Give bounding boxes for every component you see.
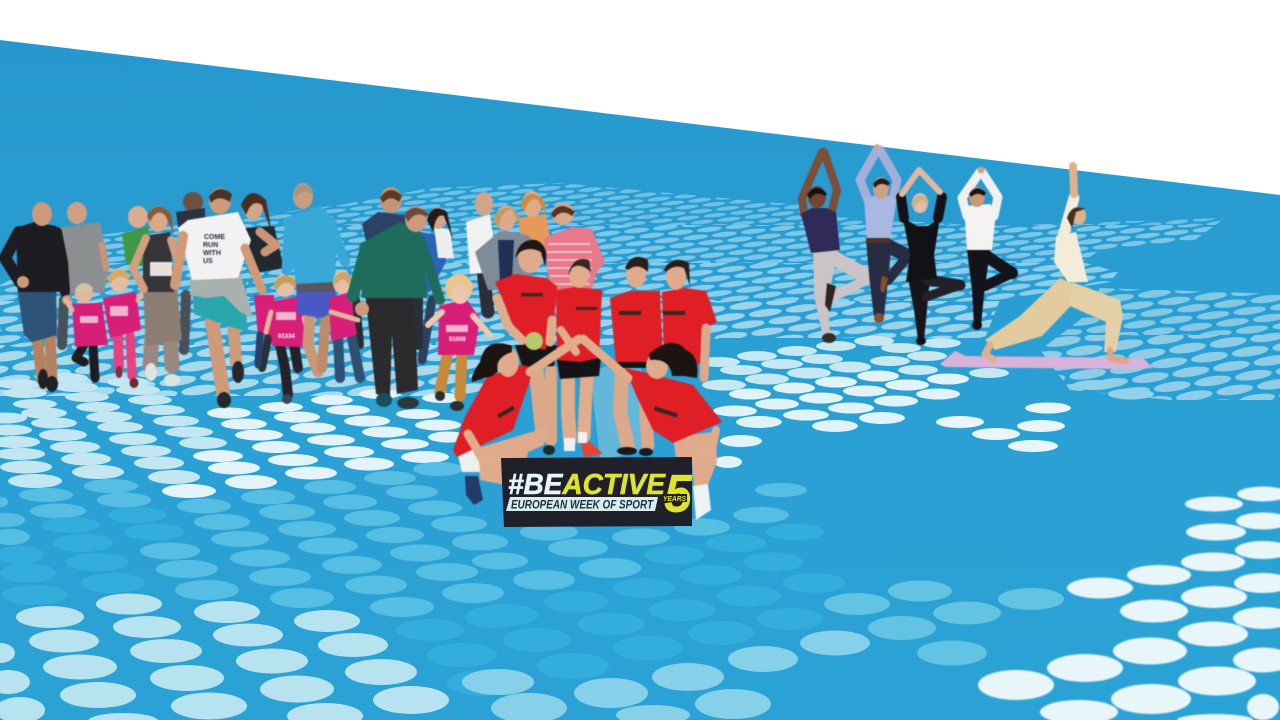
person: dark-haired woman behind	[241, 193, 284, 274]
floor patch under team	[590, 360, 650, 460]
shirt text: COME	[204, 234, 225, 241]
legs of runners in the background	[62, 295, 432, 368]
person: heads at the back	[176, 192, 205, 240]
person: yoga man in white shirt	[962, 166, 1012, 330]
person: crouching girl left	[453, 339, 579, 505]
person: yoga woman in navy top	[801, 152, 870, 343]
person: man in green sweatshirt	[353, 206, 449, 409]
dot field: deep blue faint dots	[0, 507, 845, 696]
person: navy jacket man behind	[362, 187, 416, 250]
person: woman in denim jacket	[475, 205, 540, 290]
banner numeral 5 years: 5	[664, 464, 693, 524]
person: man in bright blue top	[286, 183, 345, 372]
banner: #BEACTIVE European Week of Sport	[501, 457, 693, 527]
person: crouching girl right	[583, 339, 722, 520]
shirt text	[203, 234, 225, 265]
person: girl with dark leggings: 91334	[278, 334, 295, 340]
banner: #BEACTIVE European Week of Sport: EUROPEAN WEEK OF SPORT	[511, 500, 654, 512]
person: man in black long sleeve	[5, 202, 72, 392]
banner: #BEACTIVE European Week of Sport: YEARS	[663, 494, 686, 503]
person: girl with dark leggings	[266, 273, 312, 404]
team: red shirts group	[453, 240, 722, 520]
dot field: lighter cyan dots on the right edge of the centre mass	[824, 580, 1064, 666]
person: small child behind	[254, 295, 275, 365]
person: blonde woman in orange	[518, 191, 552, 250]
person: small boy in pink	[66, 283, 108, 378]
people: yoga group on the right	[801, 144, 1153, 369]
person: yoga man in lavender shirt	[860, 144, 908, 323]
person: grey shirt man behind	[56, 202, 109, 294]
shirt text: RUN	[203, 242, 218, 249]
person: man in white Come Run With Us tee	[175, 188, 262, 408]
person: tall girl holding ball	[495, 240, 557, 455]
person: woman in blue jacket and white top	[406, 207, 454, 345]
person: older woman in green	[122, 206, 156, 268]
banner headline: #BEACTIVE	[508, 469, 667, 501]
people: running crowd on the left	[5, 183, 454, 409]
shirt text: WITH	[203, 250, 221, 257]
dot field: far dense centre and left	[0, 180, 1280, 400]
person: second standing girl	[556, 259, 603, 457]
person: blond toddler in pink with ochre trousers: 91008	[449, 337, 466, 343]
person: yoga woman in black dress	[901, 170, 960, 345]
person: woman in tank top	[133, 206, 182, 386]
people: middle adults behind the red team	[466, 191, 605, 312]
dot field: bottom pale large dots	[0, 594, 449, 720]
dot field: lower left pale dots	[0, 373, 227, 488]
person: fourth standing girl	[662, 260, 717, 378]
dot field: right of the yoga mat	[1041, 288, 1280, 400]
person: yoga woman in lunge	[985, 166, 1126, 361]
person: blond toddler in pink with ochre trousers	[428, 274, 490, 411]
dot field: light dots below yoga group	[698, 336, 1009, 390]
shirt text: US	[203, 258, 213, 265]
person: woman in striped top	[544, 203, 605, 294]
banner strip	[506, 497, 658, 511]
person: third standing girl	[610, 257, 663, 456]
person: girl in jeans	[329, 270, 360, 378]
yoga mat	[940, 351, 1153, 369]
person: man in white shirt	[466, 192, 498, 312]
dot field: mid turquoise dots	[0, 462, 807, 617]
dot field: white bottom right cluster	[978, 486, 1280, 720]
person: girl in pink leggings	[103, 268, 143, 388]
